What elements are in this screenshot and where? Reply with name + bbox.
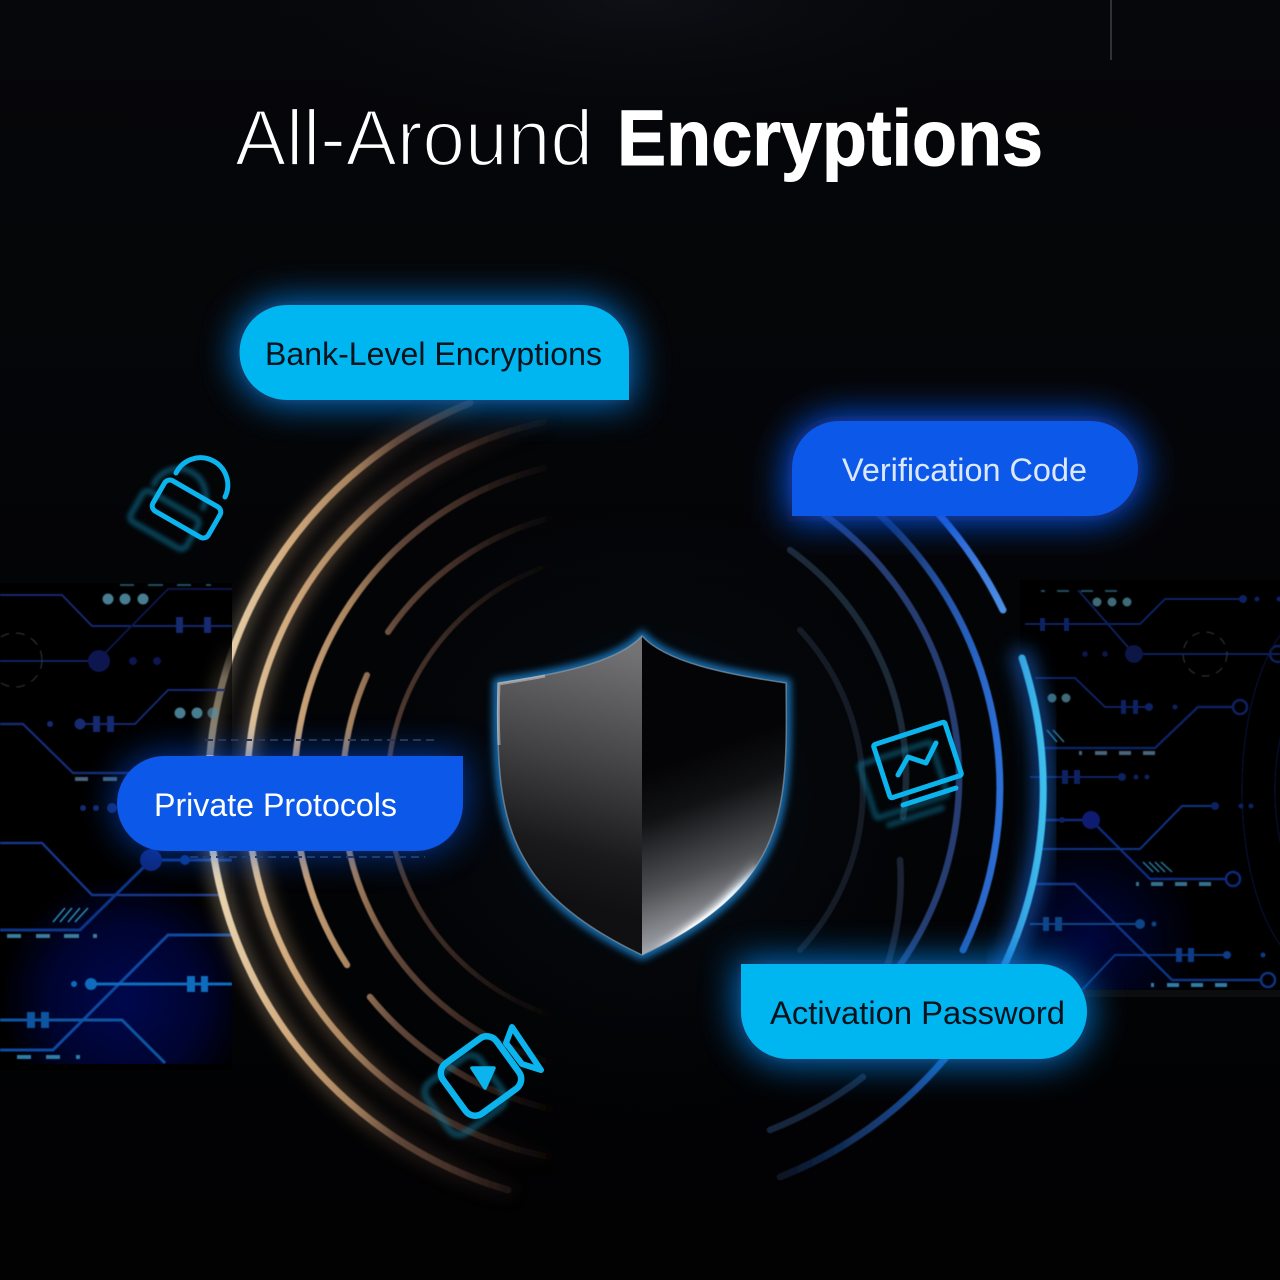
title [235,93,1043,182]
central shield [498,636,786,955]
pill: private protocols [117,756,463,851]
faint dashed lines across the left rings [190,740,435,857]
warm concentric rings on the left [209,403,555,1190]
pill: bank-level encryptions: Bank-Level Encryptions [265,336,602,372]
shield lower highlights [656,860,758,948]
pill: bank-level encryptions [240,305,629,400]
icon: video camera [420,1027,541,1139]
right circuit board panel [1020,580,1280,997]
title: Encryptions [617,93,1043,182]
circuit details at the left panel edge [177,584,232,718]
icon: padlock [128,458,228,551]
pill: activation password: Activation Password [770,995,1065,1031]
pill: verification code: Verification Code [842,452,1087,488]
title: All-Around [235,93,593,182]
icon: monitor with line chart [859,722,962,825]
pill: verification code [792,421,1138,516]
pill: activation password [741,964,1087,1059]
cool concentric rings on the right [770,439,1043,1177]
left circuit board panel [0,583,232,1070]
shield right half [642,636,786,955]
shield left half [498,636,642,955]
pill: private protocols: Private Protocols [154,787,397,823]
panel edge shade cutting the outer ring [190,583,232,755]
